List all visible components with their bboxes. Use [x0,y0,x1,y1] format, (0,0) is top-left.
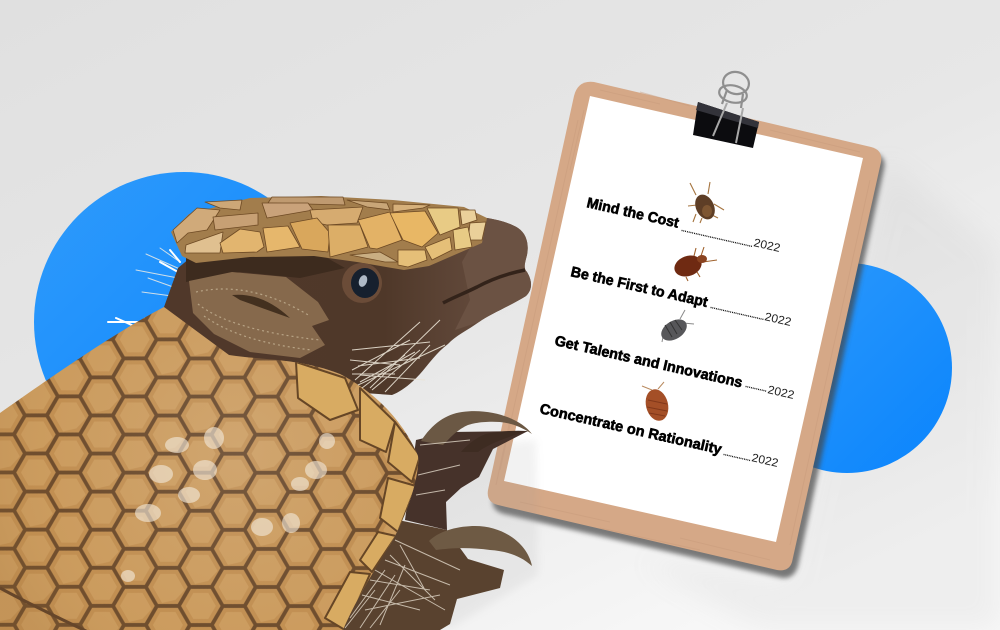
item 3 [553,333,795,402]
paper [504,96,863,542]
blue circle right [742,263,952,473]
shell fold line [0,588,125,630]
whiskers [350,320,445,392]
shell body [0,307,418,630]
shell rim scutes [296,362,420,630]
item 1: Mind the Cost [585,195,680,232]
head armour cap [171,196,487,270]
item 3: 2022 [766,384,795,402]
clipboard board [488,82,881,570]
icon: stink bug [688,182,724,223]
neck and head [164,218,531,395]
armadillo [0,196,538,630]
icon: bed bug red [671,247,717,281]
cap plates [173,197,486,267]
item 1: ........................................ [681,223,754,249]
back hair [108,248,182,326]
icon: woodlouse [657,310,694,345]
lower claw [429,526,532,566]
clip front wires [713,103,743,143]
lower foot with hair [335,440,504,630]
icon: bed bug orange [642,382,672,423]
item 4: 2022 [750,452,779,470]
armadillo shadow [340,440,538,630]
dark slit under cap [186,254,345,282]
blue circle left [34,172,334,472]
eye [342,263,382,303]
clipboard [488,70,885,578]
item 1: 2022 [752,237,781,255]
clip body [693,102,759,148]
item 4: Concentrate on Rationality [538,401,723,458]
mouth line [443,270,525,303]
item 3: ............ [745,379,768,394]
white patches on scutes [121,427,335,582]
upper claw [421,411,532,445]
clip wire rings [718,70,751,108]
clipboard cast shadow [640,160,1000,630]
ear [189,272,329,358]
binder clip [693,70,759,148]
item 2: .............................. [710,300,765,322]
muzzle [455,218,531,330]
item 4 [538,401,779,470]
upper inner claw [461,431,528,452]
item 2: Be the First to Adapt [569,264,709,311]
wood grain [496,90,870,560]
item 4: ................ [723,447,752,463]
hair strands [345,440,470,628]
shell shading [0,307,418,630]
item 2: 2022 [763,311,792,329]
clipboard hard shadow [492,88,885,578]
item 3: Get Talents and Innovations [553,333,744,391]
item 2 [569,264,792,329]
item 1 [585,195,781,255]
upper foot [405,431,528,530]
